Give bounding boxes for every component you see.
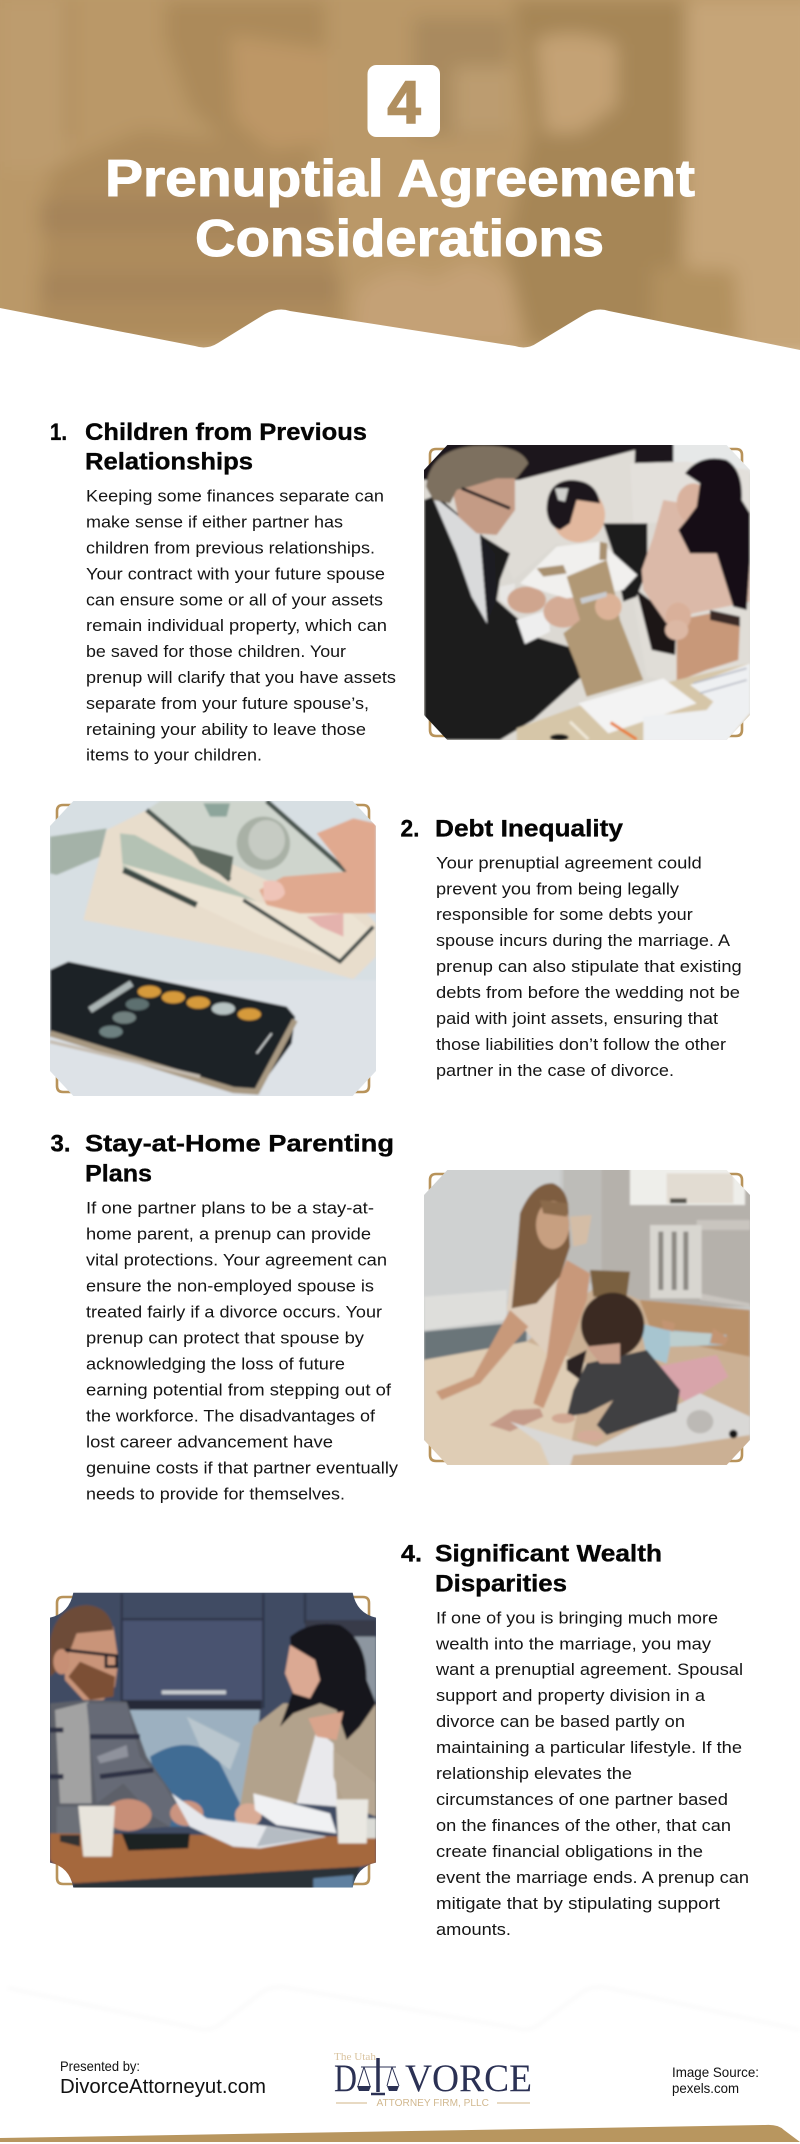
section 2 body text: paid with joint assets, ensuring that	[436, 1009, 718, 1028]
presented by	[60, 2058, 266, 2098]
section 1 body text: retaining your ability to leave those	[86, 720, 366, 739]
section 3 body text: treated fairly if a divorce occurs. Your	[86, 1302, 382, 1321]
section 1 body text: prenup will clarify that you have assets	[86, 668, 396, 687]
section 3 body text: genuine costs if that partner eventually	[86, 1458, 399, 1477]
section 1 heading: Relationships	[85, 448, 253, 476]
section 1 heading: 1.	[50, 419, 67, 446]
section 4 heading: Significant Wealth	[435, 1541, 662, 1568]
title: Prenuptial Agreement	[105, 150, 695, 208]
section 2 body text	[436, 853, 742, 1080]
photo 4: couple reviewing documents	[47, 1588, 380, 1892]
section 4 body text: relationship elevates the	[436, 1764, 632, 1783]
section 3: stay-at-home parenting plans	[50, 1131, 399, 1503]
section 1 body text: remain individual property, which can	[86, 616, 387, 635]
section 3 body text: ensure the non-employed spouse is	[86, 1276, 374, 1295]
section 4 body text	[435, 1608, 749, 1939]
section 1 heading	[50, 419, 367, 476]
section 2 body text: debts from before the wedding not be	[436, 983, 740, 1002]
white wave under header	[0, 308, 800, 380]
section 3 heading: Stay-at-Home Parenting	[85, 1131, 394, 1158]
section 3 body text	[86, 1198, 399, 1503]
section 4 heading	[401, 1541, 662, 1598]
section 1 body text: separate from your future spouse’s,	[86, 694, 369, 713]
section 3 body text: needs to provide for themselves.	[86, 1484, 345, 1503]
section 2 heading: Debt Inequality	[435, 816, 624, 843]
section 1 body text	[86, 487, 396, 765]
section 4 body text: wealth into the marriage, you may	[435, 1634, 712, 1653]
section 2 body text: prevent you from being legally	[436, 879, 680, 898]
number badge	[368, 65, 440, 137]
logo: the utah divorce attorney firm: VORCE	[405, 2057, 532, 2100]
section 4 body text: amounts.	[436, 1920, 511, 1939]
section 4 heading: Disparities	[435, 1571, 567, 1598]
section 3 body text: prenup can protect that spouse by	[86, 1328, 365, 1347]
section 4: significant wealth disparities	[401, 1541, 749, 1939]
section 3 body text: vital protections. Your agreement can	[86, 1250, 387, 1269]
presented by: DivorceAttorneyut.com	[60, 2076, 266, 2098]
section 2 body text: Your prenuptial agreement could	[436, 853, 702, 872]
section 2 body text: responsible for some debts your	[436, 905, 693, 924]
section 3 heading	[50, 1131, 394, 1188]
section 1 body text: items to your children.	[86, 746, 262, 765]
photo 1: family with attorney	[420, 440, 753, 743]
logo: the utah divorce attorney firm	[334, 2051, 532, 2109]
section 4 body text: If one of you is bringing much more	[436, 1608, 718, 1627]
title: Considerations	[195, 210, 604, 268]
image source: pexels.com	[672, 2080, 739, 2096]
section 2 body text: spouse incurs during the marriage. A	[436, 931, 731, 950]
image source: Image Source:	[672, 2064, 759, 2080]
section 4 body text: want a prenuptial agreement. Spousal	[435, 1660, 743, 1679]
section 3 body text: the workforce. The disadvantages of	[86, 1406, 375, 1425]
section 1 body text: Your contract with your future spouse	[86, 564, 385, 583]
number badge: 4	[387, 69, 421, 136]
header banner	[0, 0, 800, 380]
section 4 body text: event the marriage ends. A prenup can	[436, 1868, 749, 1887]
section 4 body text: mitigate that by stipulating support	[436, 1894, 720, 1913]
logo: the utah divorce attorney firm: The Utah	[334, 2051, 377, 2063]
section 1 body text: can ensure some or all of your assets	[86, 590, 383, 609]
section 2: debt inequality	[400, 816, 742, 1080]
section 4 body text: support and property division in a	[436, 1686, 706, 1705]
bottom brown strip	[0, 2125, 800, 2142]
section 4 heading: 4.	[401, 1541, 422, 1568]
section 4 body text: circumstances of one partner based	[436, 1790, 728, 1809]
photo 3: mother and child on floor	[420, 1167, 753, 1467]
section 4 body text: create financial obligations in the	[436, 1842, 703, 1861]
section 1 heading: Children from Previous	[85, 419, 367, 446]
section 2 body text: prenup can also stipulate that existing	[436, 957, 742, 976]
section 3 body text: earning potential from stepping out of	[86, 1380, 391, 1399]
image source	[672, 2064, 759, 2096]
section 1 body text: be saved for those children. Your	[86, 642, 346, 661]
section 1: children from previous relationships	[50, 419, 396, 765]
section 2 body text: partner in the case of divorce.	[436, 1061, 674, 1080]
title	[105, 150, 695, 268]
logo: the utah divorce attorney firm: D	[334, 2057, 357, 2100]
footer	[8, 1987, 800, 2109]
section 3 heading: Plans	[85, 1161, 152, 1188]
section 2 heading: 2.	[400, 816, 420, 843]
photo 2: cash and calculator phone	[47, 797, 380, 1100]
section 1 body text: children from previous relationships.	[86, 538, 375, 558]
section 1 body text: make sense if either partner has	[86, 513, 343, 532]
logo: the utah divorce attorney firm: ATTORNEY FIRM, PLLC	[376, 2098, 489, 2109]
section 4 body text: divorce can be based partly on	[436, 1712, 685, 1731]
section 3 body text: If one partner plans to be a stay-at-	[86, 1198, 374, 1217]
presented by: Presented by:	[60, 2058, 140, 2074]
section 4 body text: maintaining a particular lifestyle. If the	[436, 1738, 742, 1757]
icon: scales of justice	[357, 2058, 399, 2094]
section 2 body text: those liabilities don’t follow the other	[436, 1035, 726, 1054]
header photo background	[0, 0, 800, 360]
section 3 body text: home parent, a prenup can provide	[86, 1224, 371, 1243]
section 3 heading: 3.	[50, 1131, 70, 1158]
section 3 body text: lost career advancement have	[86, 1432, 333, 1451]
section 4 body text: on the finances of the other, that can	[436, 1816, 731, 1835]
section 3 body text: acknowledging the loss of future	[86, 1354, 345, 1373]
section 1 body text: Keeping some finances separate can	[86, 487, 384, 506]
